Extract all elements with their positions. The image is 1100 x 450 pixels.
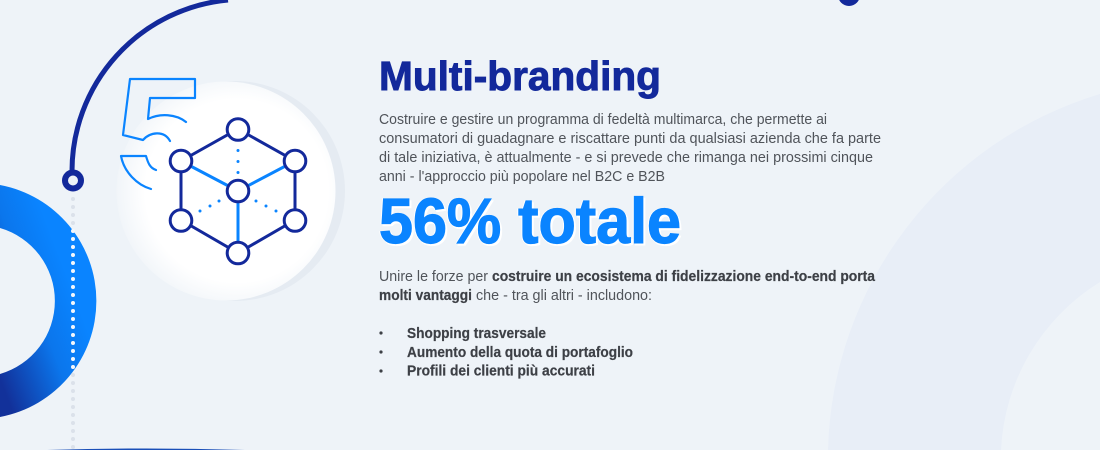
- bullet list: Shopping trasversale: [407, 326, 546, 342]
- blue ring, left: [0, 185, 96, 417]
- intro paragraph: anni - l'approccio più popolare nel B2C e B2B: [379, 169, 665, 185]
- network cube icon: [170, 119, 306, 264]
- second paragraph: costruire un ecosistema di fidelizzazione end-to-end porta: [492, 269, 876, 285]
- bullet list: Profili dei clienti più accurati: [407, 364, 595, 380]
- intro paragraph: di tale iniziativa, è attualmente - e si prevede che rimanga nei prossimi cinque: [379, 150, 873, 166]
- intro paragraph: Costruire e gestire un programma di fedeltà multimarca, che permette ai: [379, 112, 827, 128]
- bottom blue line: [47, 448, 245, 450]
- top navy dot: [838, 0, 860, 6]
- dotted vertical line: [71, 199, 75, 450]
- second paragraph: [379, 269, 876, 304]
- second paragraph: Unire le forze per: [379, 269, 488, 285]
- cube nodes: [170, 119, 306, 264]
- bullet list: Aumento della quota di portafoglio: [407, 345, 633, 361]
- second paragraph: che - tra gli altri - includono:: [476, 288, 652, 304]
- bullet list: [379, 326, 633, 380]
- number 5 outline: [121, 79, 195, 189]
- cube dotted edges: [198, 149, 278, 212]
- second paragraph: molti vantaggi: [379, 288, 472, 304]
- title: Multi-branding: [379, 53, 661, 99]
- intro paragraph: [379, 112, 881, 185]
- icon disc: [116, 81, 345, 301]
- navy arc with ring node: [65, 0, 228, 188]
- intro paragraph: consumatori di guadagnare e riscattare punti da qualsiasi azienda che fa parte: [379, 131, 881, 147]
- decorative pale ring, right: [828, 94, 1100, 450]
- cube light-blue inner edges: [181, 161, 295, 253]
- cube navy outer edges: [181, 129, 295, 253]
- big statistic: 56% totale: [379, 185, 681, 257]
